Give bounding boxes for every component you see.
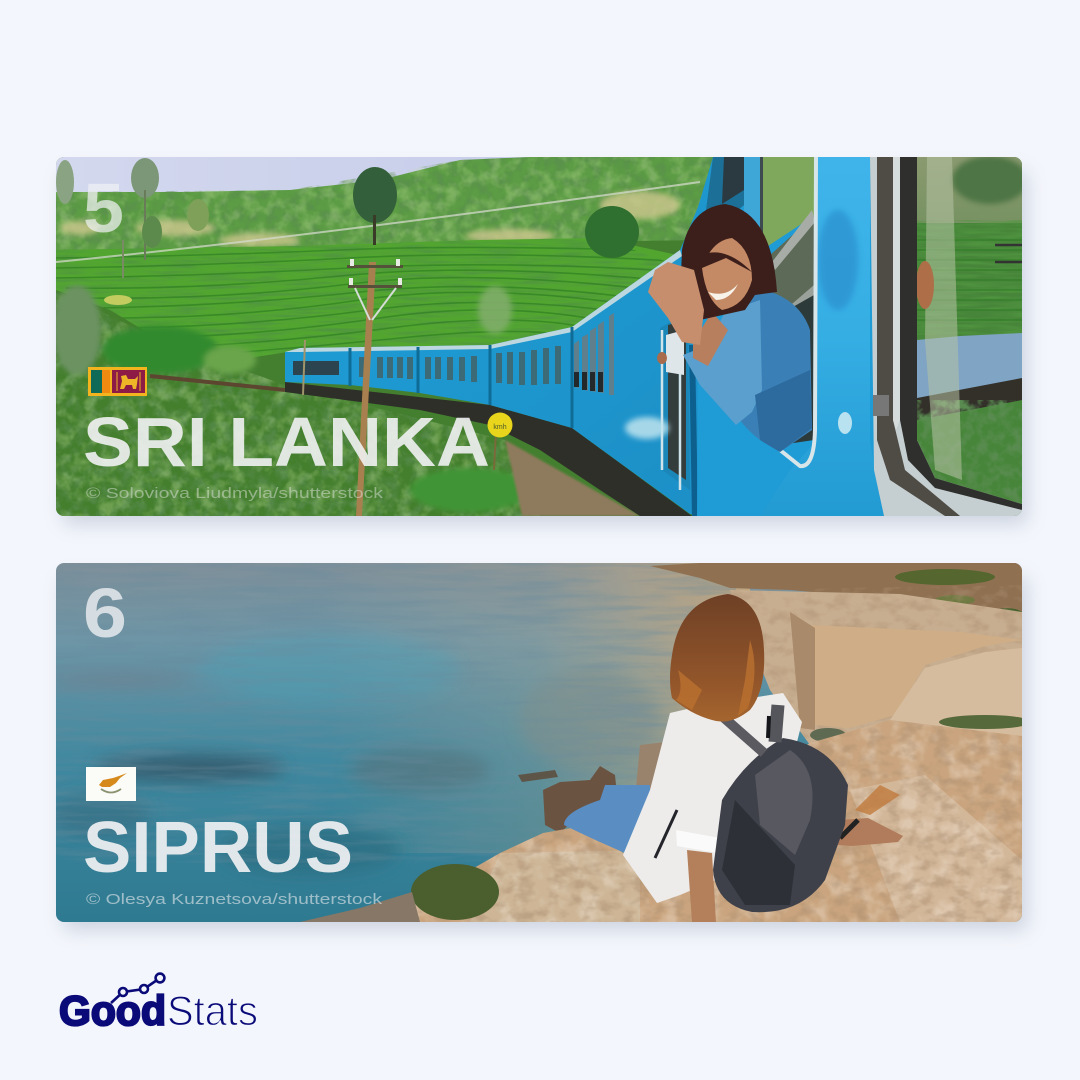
window frame and glass bbox=[870, 157, 1022, 516]
pale hillside patches bbox=[60, 191, 680, 247]
distant train coaches bbox=[285, 157, 720, 516]
number 6: 6 bbox=[83, 574, 127, 652]
sea patches bbox=[50, 634, 660, 876]
road sign: kmh bbox=[493, 424, 507, 431]
bushes bbox=[53, 285, 530, 512]
logo wordmark light: Stats bbox=[167, 987, 258, 1034]
photo: train through tea plantation bbox=[53, 156, 1028, 517]
window opening bbox=[762, 157, 815, 250]
door with passenger bbox=[660, 312, 690, 490]
road sign bbox=[488, 412, 512, 470]
woman leaning out of the window bbox=[648, 204, 812, 452]
logo: GoodStats bbox=[59, 974, 258, 1034]
utility pole bbox=[303, 259, 403, 516]
photo credit: Sri Lanka: © Soloviova Liudmyla/shutterstock bbox=[86, 485, 384, 502]
woman with backpack bbox=[564, 594, 903, 922]
flag: Sri Lanka bbox=[88, 367, 147, 396]
photo credit: Siprus: © Olesya Kuznetsova/shutterstock bbox=[86, 891, 383, 908]
trees bbox=[56, 158, 639, 278]
cliffs bbox=[730, 585, 1031, 745]
title: Sri Lanka: SRI LANKA bbox=[83, 403, 490, 481]
distant coast bbox=[650, 563, 1022, 612]
panel: Siprus bbox=[50, 563, 1031, 931]
tea rows bbox=[56, 247, 690, 358]
logo graph line bbox=[111, 974, 164, 1003]
title: Siprus: SIPRUS bbox=[83, 808, 353, 888]
logo wordmark: Good bbox=[59, 987, 166, 1034]
flag: Cyprus bbox=[86, 767, 136, 801]
carriage side and door bbox=[697, 156, 1028, 517]
photo: woman overlooking the sea bbox=[50, 563, 1031, 922]
panel: Sri Lanka bbox=[53, 156, 1028, 525]
number 5: 5 bbox=[83, 169, 124, 247]
small rocks at the waterline bbox=[518, 742, 666, 833]
foreground rocks bbox=[300, 720, 1022, 922]
